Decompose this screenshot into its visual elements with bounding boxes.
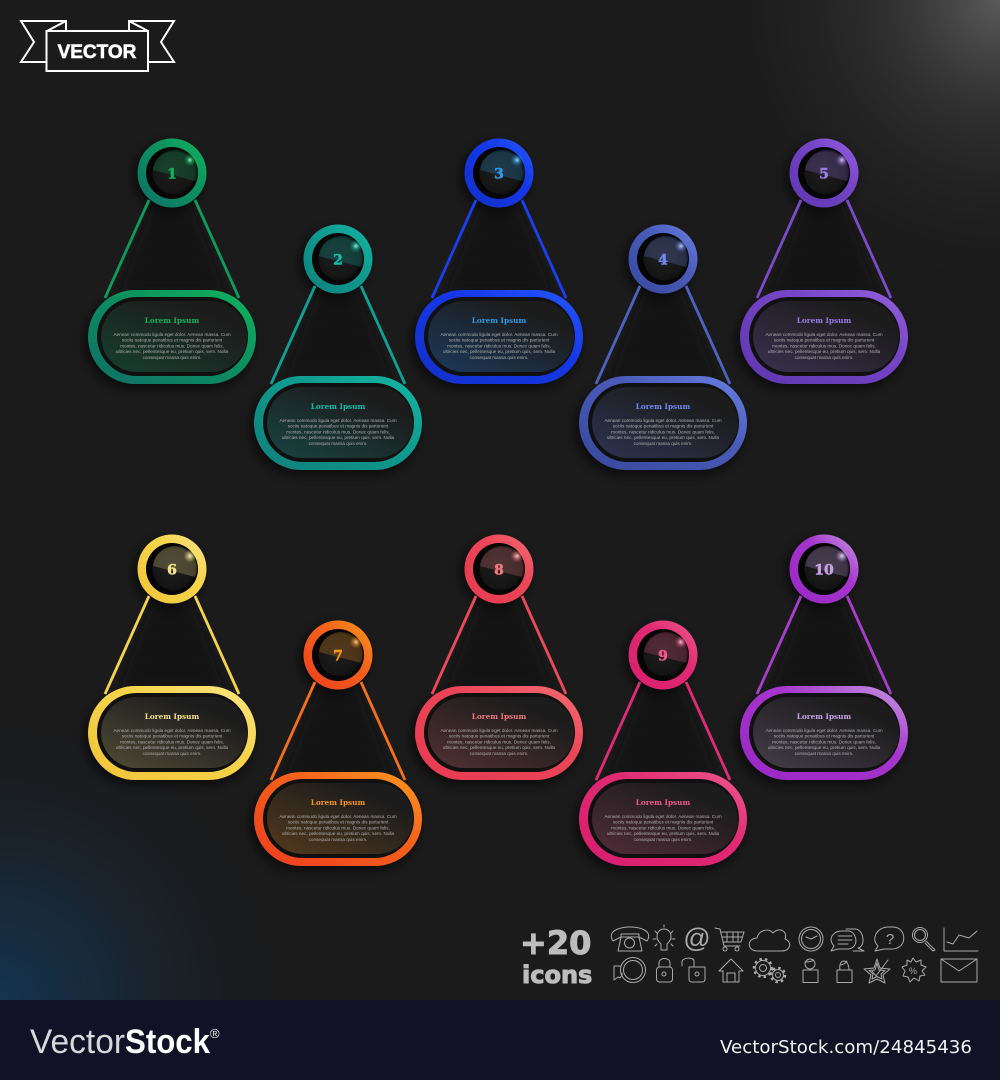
body 5: Aenean commodo ligula eget dolor. Aenean massa. Cum (765, 332, 883, 337)
badge: vector ribbon: VECTOR (58, 42, 137, 63)
body 1: Aenean commodo ligula eget dolor. Aenean massa. Cum (113, 332, 231, 337)
number badge 4: 4 (658, 252, 668, 268)
body 10: montes, nascetur ridiculus mus. Donec quam felis, (772, 739, 876, 744)
body 9: montes, nascetur ridiculus mus. Donec quam felis, (611, 825, 715, 830)
connector 7 (271, 682, 405, 780)
number badge 6 (138, 534, 206, 604)
heading 3: Lorem Ipsum (472, 316, 526, 325)
step 5 card (736, 138, 908, 389)
step 6 card (84, 534, 256, 785)
icon: at sign: @ (683, 923, 711, 953)
body 2: consequat massa quis enim. (309, 441, 367, 446)
icon: telephone (611, 927, 649, 951)
step 4 card (575, 224, 747, 475)
body 3: consequat massa quis enim. (470, 355, 528, 360)
connector 1 (105, 200, 239, 298)
connector 6 (105, 596, 239, 694)
capsule 10 (740, 686, 908, 780)
number badge 7: 7 (333, 648, 343, 664)
number badge 4 (628, 224, 698, 294)
body 3: ultricies nec, pellentesque eu, pretium quis, sem. Nulla (443, 349, 556, 354)
icon: question bubble (875, 927, 904, 951)
body 8: montes, nascetur ridiculus mus. Donec quam felis, (447, 739, 551, 744)
body 7: Aenean commodo ligula eget dolor. Aenean massa. Cum (279, 814, 397, 819)
body 4: ultricies nec, pellentesque eu, pretium quis, sem. Nulla (607, 435, 720, 440)
icon: key (614, 958, 646, 982)
heading 10: Lorem Ipsum (797, 712, 851, 721)
icon: cloud (749, 930, 790, 951)
body 2: montes, nascetur ridiculus mus. Donec quam felis, (286, 429, 390, 434)
step 7 card (250, 620, 422, 871)
number badge 5 (790, 138, 858, 208)
icon: envelope (941, 959, 977, 982)
body 6: ultricies nec, pellentesque eu, pretium quis, sem. Nulla (116, 745, 229, 750)
body 4: montes, nascetur ridiculus mus. Donec quam felis, (611, 429, 715, 434)
number badge 1 (138, 138, 206, 208)
icon count caption (520, 924, 592, 989)
connector 9 (596, 682, 730, 780)
body 5: consequat massa quis enim. (795, 355, 853, 360)
heading 4: Lorem Ipsum (636, 402, 690, 411)
icon: magnifier (912, 928, 935, 951)
body 2: Aenean commodo ligula eget dolor. Aenean massa. Cum (279, 418, 397, 423)
number badge 1: 1 (167, 166, 177, 182)
icon: percent badge: % (909, 966, 917, 976)
icon: light bulb (653, 925, 675, 950)
number badge 8 (464, 534, 534, 604)
body 9: sociis natoque penatibus et magnis dis parturient (613, 820, 714, 825)
capsule 7 (254, 772, 422, 866)
body 7: montes, nascetur ridiculus mus. Donec quam felis, (286, 825, 390, 830)
body 2: ultricies nec, pellentesque eu, pretium quis, sem. Nulla (282, 435, 395, 440)
body 5: sociis natoque penatibus et magnis dis parturient (774, 338, 875, 343)
capsule 4 (579, 376, 747, 470)
body 6: sociis natoque penatibus et magnis dis parturient (122, 734, 223, 739)
number badge 10: 10 (814, 562, 834, 578)
number badge 7 (304, 620, 372, 690)
body 1: montes, nascetur ridiculus mus. Donec quam felis, (120, 343, 224, 348)
footer logo (30, 1023, 220, 1061)
icon: chat bubbles (831, 929, 864, 951)
heading 6: Lorem Ipsum (145, 712, 199, 721)
capsule 1 (88, 290, 256, 384)
number badge 2 (304, 224, 372, 294)
icon: question bubble: ? (886, 931, 894, 948)
footer logo: Stock (125, 1023, 210, 1061)
heading 2: Lorem Ipsum (311, 402, 365, 411)
number badge 3: 3 (494, 166, 504, 182)
body 1: consequat massa quis enim. (143, 355, 201, 360)
number badge 9: 9 (658, 648, 668, 664)
icon set (611, 923, 978, 983)
icon: house (719, 959, 743, 982)
connector 4 (596, 286, 730, 384)
footer image id: VectorStock.com/24845436 (720, 1037, 972, 1058)
body 7: sociis natoque penatibus et magnis dis parturient (288, 820, 389, 825)
badge: vector ribbon (21, 21, 174, 71)
body 3: montes, nascetur ridiculus mus. Donec quam felis, (447, 343, 551, 348)
body 8: ultricies nec, pellentesque eu, pretium quis, sem. Nulla (443, 745, 556, 750)
icon: shopping cart (715, 928, 744, 951)
heading 5: Lorem Ipsum (797, 316, 851, 325)
body 8: Aenean commodo ligula eget dolor. Aenean massa. Cum (440, 728, 558, 733)
icon count caption: +20 (520, 924, 591, 962)
body 6: montes, nascetur ridiculus mus. Donec quam felis, (120, 739, 224, 744)
body 1: sociis natoque penatibus et magnis dis parturient (122, 338, 223, 343)
body 4: consequat massa quis enim. (634, 441, 692, 446)
body 5: ultricies nec, pellentesque eu, pretium quis, sem. Nulla (768, 349, 881, 354)
connector 2 (271, 286, 405, 384)
body 4: Aenean commodo ligula eget dolor. Aenean massa. Cum (604, 418, 722, 423)
body 3: sociis natoque penatibus et magnis dis parturient (449, 338, 550, 343)
connector 8 (432, 596, 566, 694)
heading 7: Lorem Ipsum (311, 798, 365, 807)
body 1: ultricies nec, pellentesque eu, pretium quis, sem. Nulla (116, 349, 229, 354)
body 6: Aenean commodo ligula eget dolor. Aenean massa. Cum (113, 728, 231, 733)
footer logo: Vector (30, 1023, 125, 1061)
step 9 card (575, 620, 747, 871)
number badge 3 (464, 138, 534, 208)
icon: clock (799, 927, 823, 951)
body 7: consequat massa quis enim. (309, 837, 367, 842)
body 3: Aenean commodo ligula eget dolor. Aenean massa. Cum (440, 332, 558, 337)
step 10 card (736, 534, 908, 785)
icon: line chart (944, 928, 978, 951)
step 8 card (411, 534, 583, 785)
capsule 9 (579, 772, 747, 866)
body 9: Aenean commodo ligula eget dolor. Aenean massa. Cum (604, 814, 722, 819)
body 9: consequat massa quis enim. (634, 837, 692, 842)
connector 10 (757, 596, 891, 694)
capsule 2 (254, 376, 422, 470)
body 5: montes, nascetur ridiculus mus. Donec quam felis, (772, 343, 876, 348)
heading 9: Lorem Ipsum (636, 798, 690, 807)
number badge 6: 6 (167, 562, 177, 578)
number badge 8: 8 (494, 562, 504, 578)
number badge 5: 5 (819, 166, 829, 182)
connector 3 (432, 200, 566, 298)
heading 1: Lorem Ipsum (145, 316, 199, 325)
icon: woman (837, 961, 852, 982)
body 9: ultricies nec, pellentesque eu, pretium quis, sem. Nulla (607, 831, 720, 836)
capsule 5 (740, 290, 908, 384)
step 2 card (250, 224, 422, 475)
number badge 10 (790, 534, 858, 604)
capsule 6 (88, 686, 256, 780)
body 4: sociis natoque penatibus et magnis dis parturient (613, 424, 714, 429)
icon count caption: icons (522, 961, 592, 989)
footer bar (0, 1000, 1000, 1080)
footer logo: ® (210, 1026, 220, 1041)
body 2: sociis natoque penatibus et magnis dis parturient (288, 424, 389, 429)
icon: open lock (682, 958, 705, 982)
icon: star (864, 959, 890, 983)
body 8: sociis natoque penatibus et magnis dis parturient (449, 734, 550, 739)
capsule 3 (415, 290, 583, 384)
icon: man (803, 959, 818, 982)
icon: percent badge (902, 958, 926, 982)
body 10: ultricies nec, pellentesque eu, pretium quis, sem. Nulla (768, 745, 881, 750)
body 8: consequat massa quis enim. (470, 751, 528, 756)
number badge 9 (628, 620, 698, 690)
icon: gears (754, 959, 785, 982)
connector 5 (757, 200, 891, 298)
body 10: Aenean commodo ligula eget dolor. Aenean massa. Cum (765, 728, 883, 733)
body 6: consequat massa quis enim. (143, 751, 201, 756)
icon: closed lock (656, 958, 672, 982)
heading 8: Lorem Ipsum (472, 712, 526, 721)
number badge 2: 2 (333, 252, 343, 268)
body 10: consequat massa quis enim. (795, 751, 853, 756)
body 7: ultricies nec, pellentesque eu, pretium quis, sem. Nulla (282, 831, 395, 836)
body 10: sociis natoque penatibus et magnis dis parturient (774, 734, 875, 739)
capsule 8 (415, 686, 583, 780)
step 3 card (411, 138, 583, 389)
step 1 card (84, 138, 256, 389)
